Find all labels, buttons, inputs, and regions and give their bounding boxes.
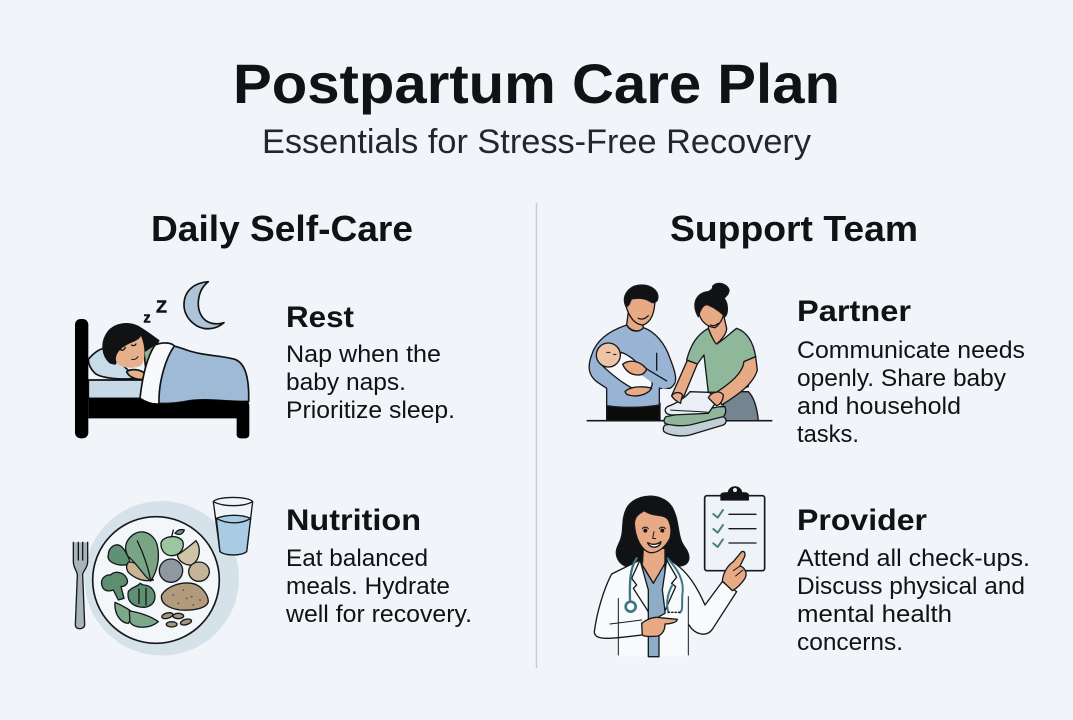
text: rest description: Nap when the bbox=[286, 341, 441, 368]
text: nutrition description bbox=[285, 545, 472, 628]
heading: rest: Rest bbox=[286, 301, 354, 334]
icon: partner holding baby and woman folding laundry bbox=[587, 283, 772, 436]
heading: provider: Provider bbox=[797, 504, 927, 537]
text: rest description bbox=[286, 341, 455, 424]
text: provider description: Discuss physical and bbox=[797, 573, 1025, 600]
text: nutrition description: meals. Hydrate bbox=[286, 573, 450, 600]
text: nutrition description: Eat balanced bbox=[286, 545, 428, 572]
item: rest bbox=[286, 301, 455, 424]
text: provider description bbox=[797, 545, 1030, 656]
text: partner description: tasks. bbox=[797, 421, 859, 448]
icon: plate of food with fork and water glass bbox=[73, 497, 253, 656]
title: Postpartum Care Plan bbox=[233, 52, 840, 115]
subtitle: Essentials for Stress-Free Recovery bbox=[262, 123, 811, 161]
heading: nutrition: Nutrition bbox=[286, 504, 421, 537]
text: rest description: Prioritize sleep. bbox=[286, 397, 455, 424]
heading: partner: Partner bbox=[797, 295, 911, 328]
heading: support team: Support Team bbox=[670, 208, 918, 249]
text: provider description: concerns. bbox=[797, 629, 903, 656]
panel: daily self-care bbox=[73, 208, 472, 656]
text: nutrition description: well for recovery. bbox=[285, 601, 472, 628]
text: partner description bbox=[797, 337, 1025, 448]
item: partner bbox=[797, 295, 1025, 448]
icon: doctor pointing at clipboard bbox=[594, 487, 765, 657]
icon: sleeping woman in bed: z bbox=[143, 311, 151, 327]
panel: support team bbox=[587, 208, 1030, 657]
icon: sleeping woman in bed bbox=[75, 282, 249, 438]
item: nutrition bbox=[285, 504, 472, 628]
icon: sleeping woman in bed: Z bbox=[156, 297, 167, 317]
heading: daily self-care: Daily Self-Care bbox=[151, 208, 413, 249]
text: partner description: Communicate needs bbox=[797, 337, 1025, 364]
text: partner description: openly. Share baby bbox=[797, 365, 1006, 392]
text: partner description: and household bbox=[797, 393, 961, 420]
text: provider description: Attend all check-ups. bbox=[797, 545, 1030, 572]
text: provider description: mental health bbox=[797, 601, 952, 628]
item: provider bbox=[797, 504, 1030, 656]
text: rest description: baby naps. bbox=[286, 369, 406, 396]
